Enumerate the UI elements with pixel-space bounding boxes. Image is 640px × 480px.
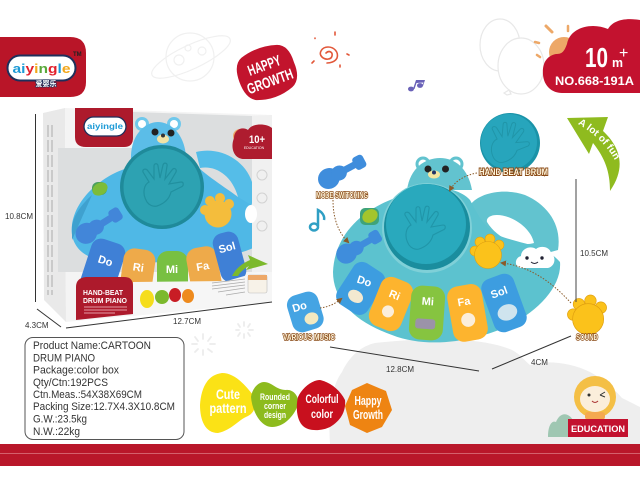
drum xyxy=(382,183,472,273)
callout arrow: sound xyxy=(502,263,571,303)
brand logo panel xyxy=(0,37,86,97)
callout label: mode switching: MODE SWITCHING xyxy=(316,191,368,200)
dimension: toy height: 10.5CM xyxy=(580,249,608,258)
key: Sol xyxy=(478,271,530,335)
box title panel: DRUM PIANO xyxy=(83,298,128,305)
keys in box: Ri xyxy=(132,261,145,275)
toy body xyxy=(72,151,254,262)
icon: orange sun xyxy=(535,26,579,67)
box age badge: EDUCATION xyxy=(244,146,265,150)
sound paw xyxy=(470,234,504,268)
dimension: toy width xyxy=(330,347,479,374)
dimension: box depth xyxy=(25,309,61,330)
feature badge: cute pattern xyxy=(200,373,255,433)
keys in box: Do xyxy=(96,254,114,270)
mode switch xyxy=(360,206,380,226)
age badge: 10 xyxy=(585,42,608,73)
box green arrow xyxy=(232,255,268,276)
feature badge: happy growth xyxy=(345,383,392,433)
specification box: DRUM PIANO xyxy=(33,352,95,364)
age badge xyxy=(535,19,640,93)
green arrow: a lot of fun: A lot of fun xyxy=(578,120,619,160)
specification box: Ctn.Meas.:54X38X69CM xyxy=(33,389,142,401)
feature badge: colorful color: color xyxy=(311,407,333,421)
badge: happy growth xyxy=(231,39,303,107)
key: Fa xyxy=(445,282,490,344)
box lower band xyxy=(133,268,272,316)
logo pill: aiyingle xyxy=(12,61,70,76)
callout arrow: various music xyxy=(320,299,341,308)
feature badge: colorful color xyxy=(297,380,345,430)
specification box: Package:color box xyxy=(33,364,119,376)
callout arrow: hand beat drum xyxy=(450,173,477,190)
feature badge: rounded corner design: corner xyxy=(264,401,286,411)
box title panel xyxy=(76,277,133,320)
icon: swirl sun xyxy=(312,32,349,67)
key: Sol: Sol xyxy=(489,284,509,302)
badge: happy growth: HAPPY xyxy=(246,52,283,80)
green hills xyxy=(548,414,573,437)
badge: happy growth: GROWTH xyxy=(245,66,296,98)
box right strip xyxy=(252,115,272,272)
box logo panel: aiyingle xyxy=(87,121,123,131)
dimension: box width: 12.7CM xyxy=(173,317,201,326)
drum xyxy=(120,145,204,229)
icon: blue music note xyxy=(310,210,324,230)
specification box: Product Name:CARTOON xyxy=(33,340,151,352)
guitar xyxy=(72,203,126,248)
specification box: Qty/Ctn:192PCS xyxy=(33,377,108,389)
toy body xyxy=(333,187,560,342)
toy in box xyxy=(72,117,254,303)
lion xyxy=(574,376,616,420)
age badge: m xyxy=(612,55,623,70)
keys in box xyxy=(77,229,249,303)
feature badge: rounded corner design xyxy=(251,382,298,427)
callout label: hand beat drum: HAND BEAT DRUM xyxy=(479,167,548,178)
trademark: TM xyxy=(73,52,82,58)
dimension: toy depth xyxy=(492,336,571,369)
feature badge: rounded corner design: design xyxy=(264,410,286,420)
box front face xyxy=(65,108,272,322)
dimension: box width xyxy=(66,302,272,328)
detail: sound paw xyxy=(567,295,607,335)
handle ring xyxy=(470,192,559,255)
key: Fa: Fa xyxy=(457,295,472,309)
specification box: N.W.:22kg xyxy=(33,426,80,438)
box small badges xyxy=(140,288,194,308)
dimension: box depth: 4.3CM xyxy=(25,321,49,330)
feature badge: cute pattern: Cute xyxy=(216,386,240,402)
callout label: sound: SOUND xyxy=(576,333,598,342)
specification box: G.W.:23.5kg xyxy=(33,414,87,426)
key: Do xyxy=(332,258,389,319)
box window xyxy=(58,112,252,272)
cloud on box xyxy=(245,205,257,223)
specification box xyxy=(25,338,184,440)
detail: Do key: Do xyxy=(291,299,309,315)
callout label: various music: VARIOUS MUSIC xyxy=(283,333,335,342)
education mascot xyxy=(548,376,628,437)
detail: Do key xyxy=(284,289,326,335)
logo pill xyxy=(8,56,76,88)
keys in box: Sol xyxy=(217,240,237,256)
bottom red stripe xyxy=(0,444,640,466)
age badge: NO.668-191A xyxy=(555,76,634,88)
green arrow: a lot of fun xyxy=(567,117,620,191)
feature badge: cute pattern: pattern xyxy=(210,400,246,416)
keys in box: Fa xyxy=(195,260,211,274)
piano keys xyxy=(332,258,530,344)
key: Mi: Mi xyxy=(421,296,434,308)
balloons xyxy=(480,19,544,95)
box age badge: 10+ xyxy=(249,134,265,146)
specification box: Packing Size:12.7X4.3X10.8CM xyxy=(33,401,175,413)
feature badge: happy growth: Happy xyxy=(354,393,382,408)
key: Ri: Ri xyxy=(387,288,402,303)
box side face xyxy=(43,108,66,322)
box logo panel xyxy=(75,108,133,147)
key: Mi xyxy=(408,285,446,341)
key: Ri xyxy=(365,274,417,334)
dimension: toy height xyxy=(576,179,608,302)
feature badge: colorful color: Colorful xyxy=(306,392,338,406)
main toy xyxy=(332,156,560,344)
grey hill background xyxy=(330,339,640,444)
dimension: toy width: 12.8CM xyxy=(386,365,414,374)
logo pill: 爱婴乐 xyxy=(36,79,56,88)
yellow paw xyxy=(200,193,234,228)
box safety tag xyxy=(248,275,267,293)
dimension: toy depth: 4CM xyxy=(531,358,548,367)
feature badge: rounded corner design: Rounded xyxy=(260,392,290,402)
product box xyxy=(43,108,272,322)
callout arrow: mode switching xyxy=(333,200,348,242)
box age badge xyxy=(232,124,272,159)
education tag: EDUCATION xyxy=(571,424,625,435)
cloud xyxy=(516,247,554,268)
age badge: + xyxy=(619,45,628,62)
key: Do: Do xyxy=(355,274,373,290)
detail: drum disc xyxy=(480,113,540,173)
switch xyxy=(90,180,110,198)
box small print xyxy=(212,279,245,295)
box title panel: HAND-BEAT xyxy=(83,290,124,297)
detail: guitar xyxy=(314,150,369,193)
feature badge: happy growth: Growth xyxy=(353,407,383,422)
icon: purple music note xyxy=(408,80,425,91)
decorative sparks xyxy=(192,322,253,355)
dimension: box height: 10.8CM xyxy=(5,212,33,221)
bear head xyxy=(131,117,186,160)
icon: planet outline xyxy=(147,28,235,86)
bear head xyxy=(407,156,472,190)
guitar button xyxy=(333,226,385,267)
keys in box: Mi xyxy=(166,264,178,276)
